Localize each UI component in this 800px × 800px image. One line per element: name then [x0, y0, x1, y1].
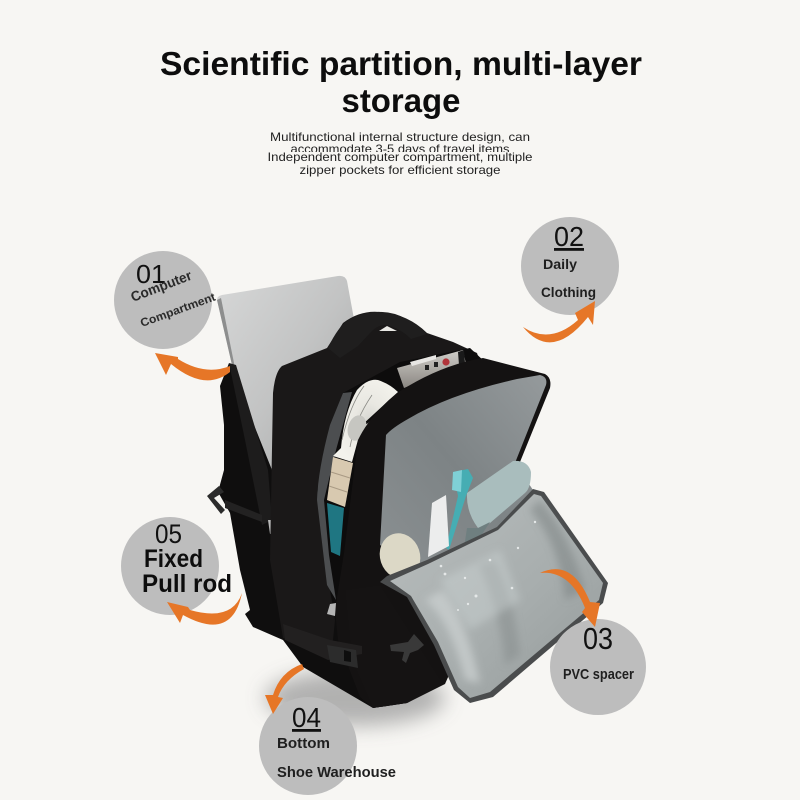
folded clothes [327, 457, 353, 507]
compartment interior [317, 348, 485, 620]
gray lining [317, 392, 352, 600]
waist strap [283, 624, 362, 660]
arrow 01 [155, 353, 230, 380]
circle 03 [550, 619, 646, 715]
laptop [217, 276, 356, 480]
arrow 03 [540, 569, 600, 627]
number 05: 05 [155, 519, 182, 549]
label 01 [128, 267, 217, 330]
arrow 04 [265, 664, 304, 714]
label 01: Compartment [139, 291, 217, 330]
number 03: 03 [583, 621, 613, 656]
floor shadow [265, 670, 445, 726]
soap [374, 528, 426, 584]
toothbrush [446, 469, 473, 550]
description text: Independent computer compartment, multiple [268, 150, 533, 164]
description text: zipper pockets for efficient storage [300, 163, 501, 177]
lower body [345, 585, 443, 708]
number 04: 04 [292, 702, 321, 733]
circle 01 [114, 251, 212, 349]
black buckle [327, 645, 358, 668]
label 04 [277, 736, 396, 781]
backpack [207, 312, 608, 708]
arrow 05 [167, 593, 242, 625]
title [160, 45, 642, 119]
label 04: Bottom [277, 736, 330, 752]
camera [397, 350, 466, 388]
main body front panel [270, 312, 480, 650]
number 02: 02 [554, 221, 584, 252]
label 05: Pull rod [142, 570, 232, 598]
description text: Multifunctional internal structure design, can [270, 130, 530, 144]
circle 05 [121, 517, 219, 615]
label 04: Shoe Warehouse [277, 765, 396, 781]
callout 03: PVC spacer [550, 619, 646, 715]
title: storage [342, 82, 460, 119]
back panel and straps [218, 363, 470, 708]
towel [467, 461, 531, 528]
label 02: Daily [543, 257, 578, 272]
lid rim black band [335, 358, 550, 708]
label 05: Fixed [144, 545, 203, 573]
callout 04: bottom shoe warehouse [259, 697, 396, 795]
zipper pull, upper [268, 520, 275, 534]
gray side buckle [390, 634, 424, 663]
circle 04 [259, 697, 357, 795]
lid silver lining [380, 375, 546, 575]
side buckle [207, 486, 225, 514]
plate [333, 380, 398, 462]
teal clothes [327, 503, 344, 556]
front flap [380, 489, 608, 703]
description text [268, 130, 533, 177]
circle 02 [521, 217, 619, 315]
title: Scientific partition, multi-layer [160, 45, 642, 82]
number 01: 01 [136, 259, 166, 289]
callout 05: fixed pull rod [121, 517, 232, 615]
label 05 [142, 545, 232, 598]
callout 01: computer compartment [114, 251, 217, 349]
top handle [328, 312, 427, 358]
description text: accommodate 3-5 days of travel items [290, 142, 510, 156]
label 03: PVC spacer [563, 666, 634, 683]
label 02: Clothing [541, 285, 596, 300]
label 01: Computer [128, 267, 194, 305]
white card [428, 495, 449, 557]
label 02 [541, 257, 596, 300]
callout 02: daily clothing [521, 217, 619, 315]
zipper pull, lower [327, 603, 336, 616]
arrow 02 [523, 301, 595, 342]
